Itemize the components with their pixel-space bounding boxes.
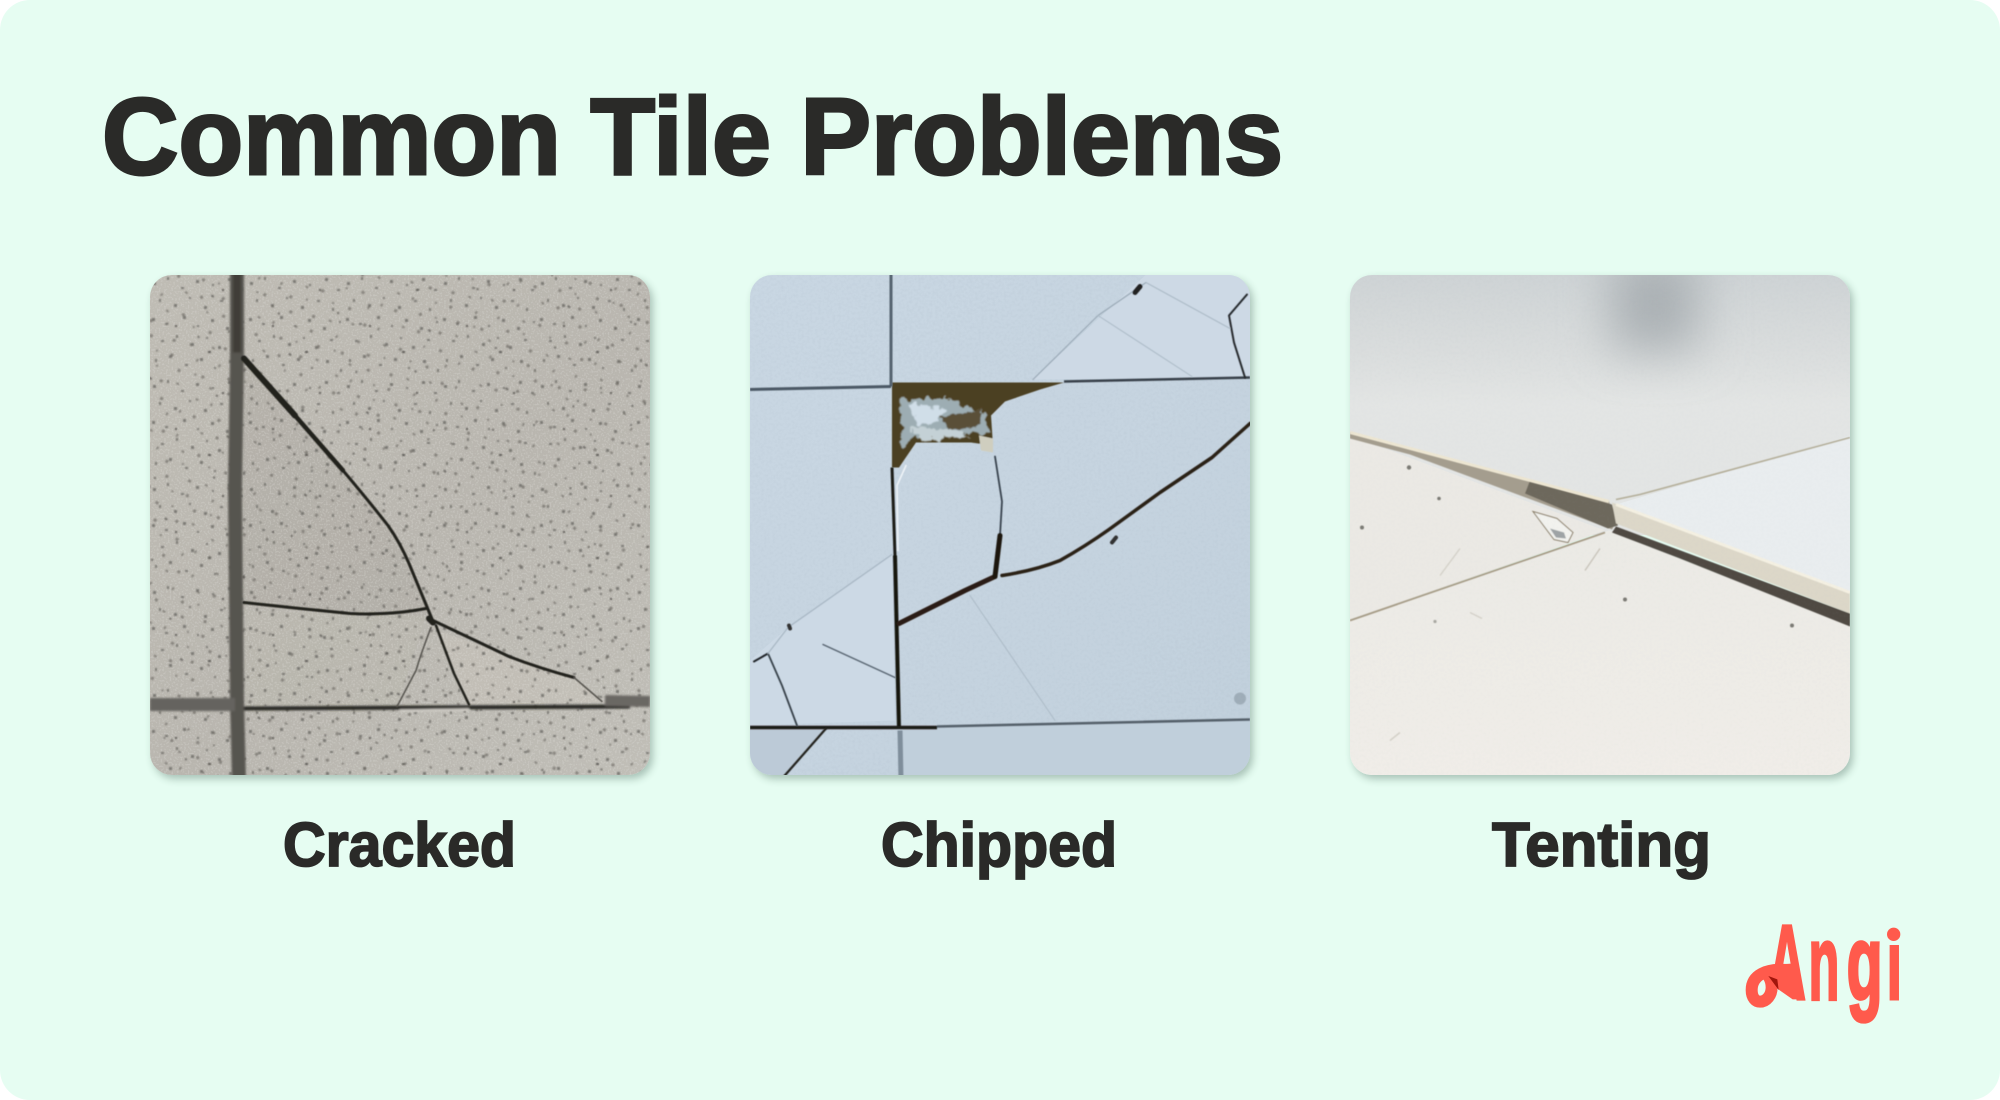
tenting ridge	[1350, 432, 1850, 626]
broken shard shading	[244, 360, 605, 706]
cracks	[244, 358, 602, 706]
lower left tile	[1350, 435, 1605, 620]
grout lines	[150, 270, 650, 780]
stain spots	[1234, 692, 1246, 704]
lighter shards	[750, 274, 1250, 780]
tile surface	[750, 274, 1250, 774]
logo: Angi	[1746, 924, 1900, 1024]
logo: Angi: n	[1809, 902, 1839, 1022]
label: Tenting: Tenting	[1492, 811, 1711, 880]
label: Chipped: Chipped	[881, 811, 1117, 880]
upper tile	[1350, 274, 1850, 534]
broken chip	[1533, 511, 1573, 542]
panel: cracked tile photo	[150, 274, 650, 774]
logo: Angi: i	[1886, 902, 1903, 1022]
panel: chipped tile photo	[750, 274, 1250, 774]
panel: tenting tile photo	[1350, 274, 1850, 774]
label: Cracked: Cracked	[283, 811, 516, 880]
logo: Angi: g	[1847, 902, 1883, 1022]
lower tile	[1350, 530, 1850, 780]
grout lines	[750, 270, 1250, 780]
chip: exposed mortar	[892, 382, 1064, 467]
tile surface	[150, 274, 650, 774]
logo: Angi: A	[1768, 902, 1806, 1022]
debris specks	[1360, 465, 1794, 627]
speckles	[0, 0, 1030, 1100]
right tile	[1616, 435, 1850, 592]
title: Common Tile Problems	[102, 76, 1283, 198]
fracture lines	[754, 282, 1250, 777]
edge highlights and seams	[1350, 432, 1850, 740]
